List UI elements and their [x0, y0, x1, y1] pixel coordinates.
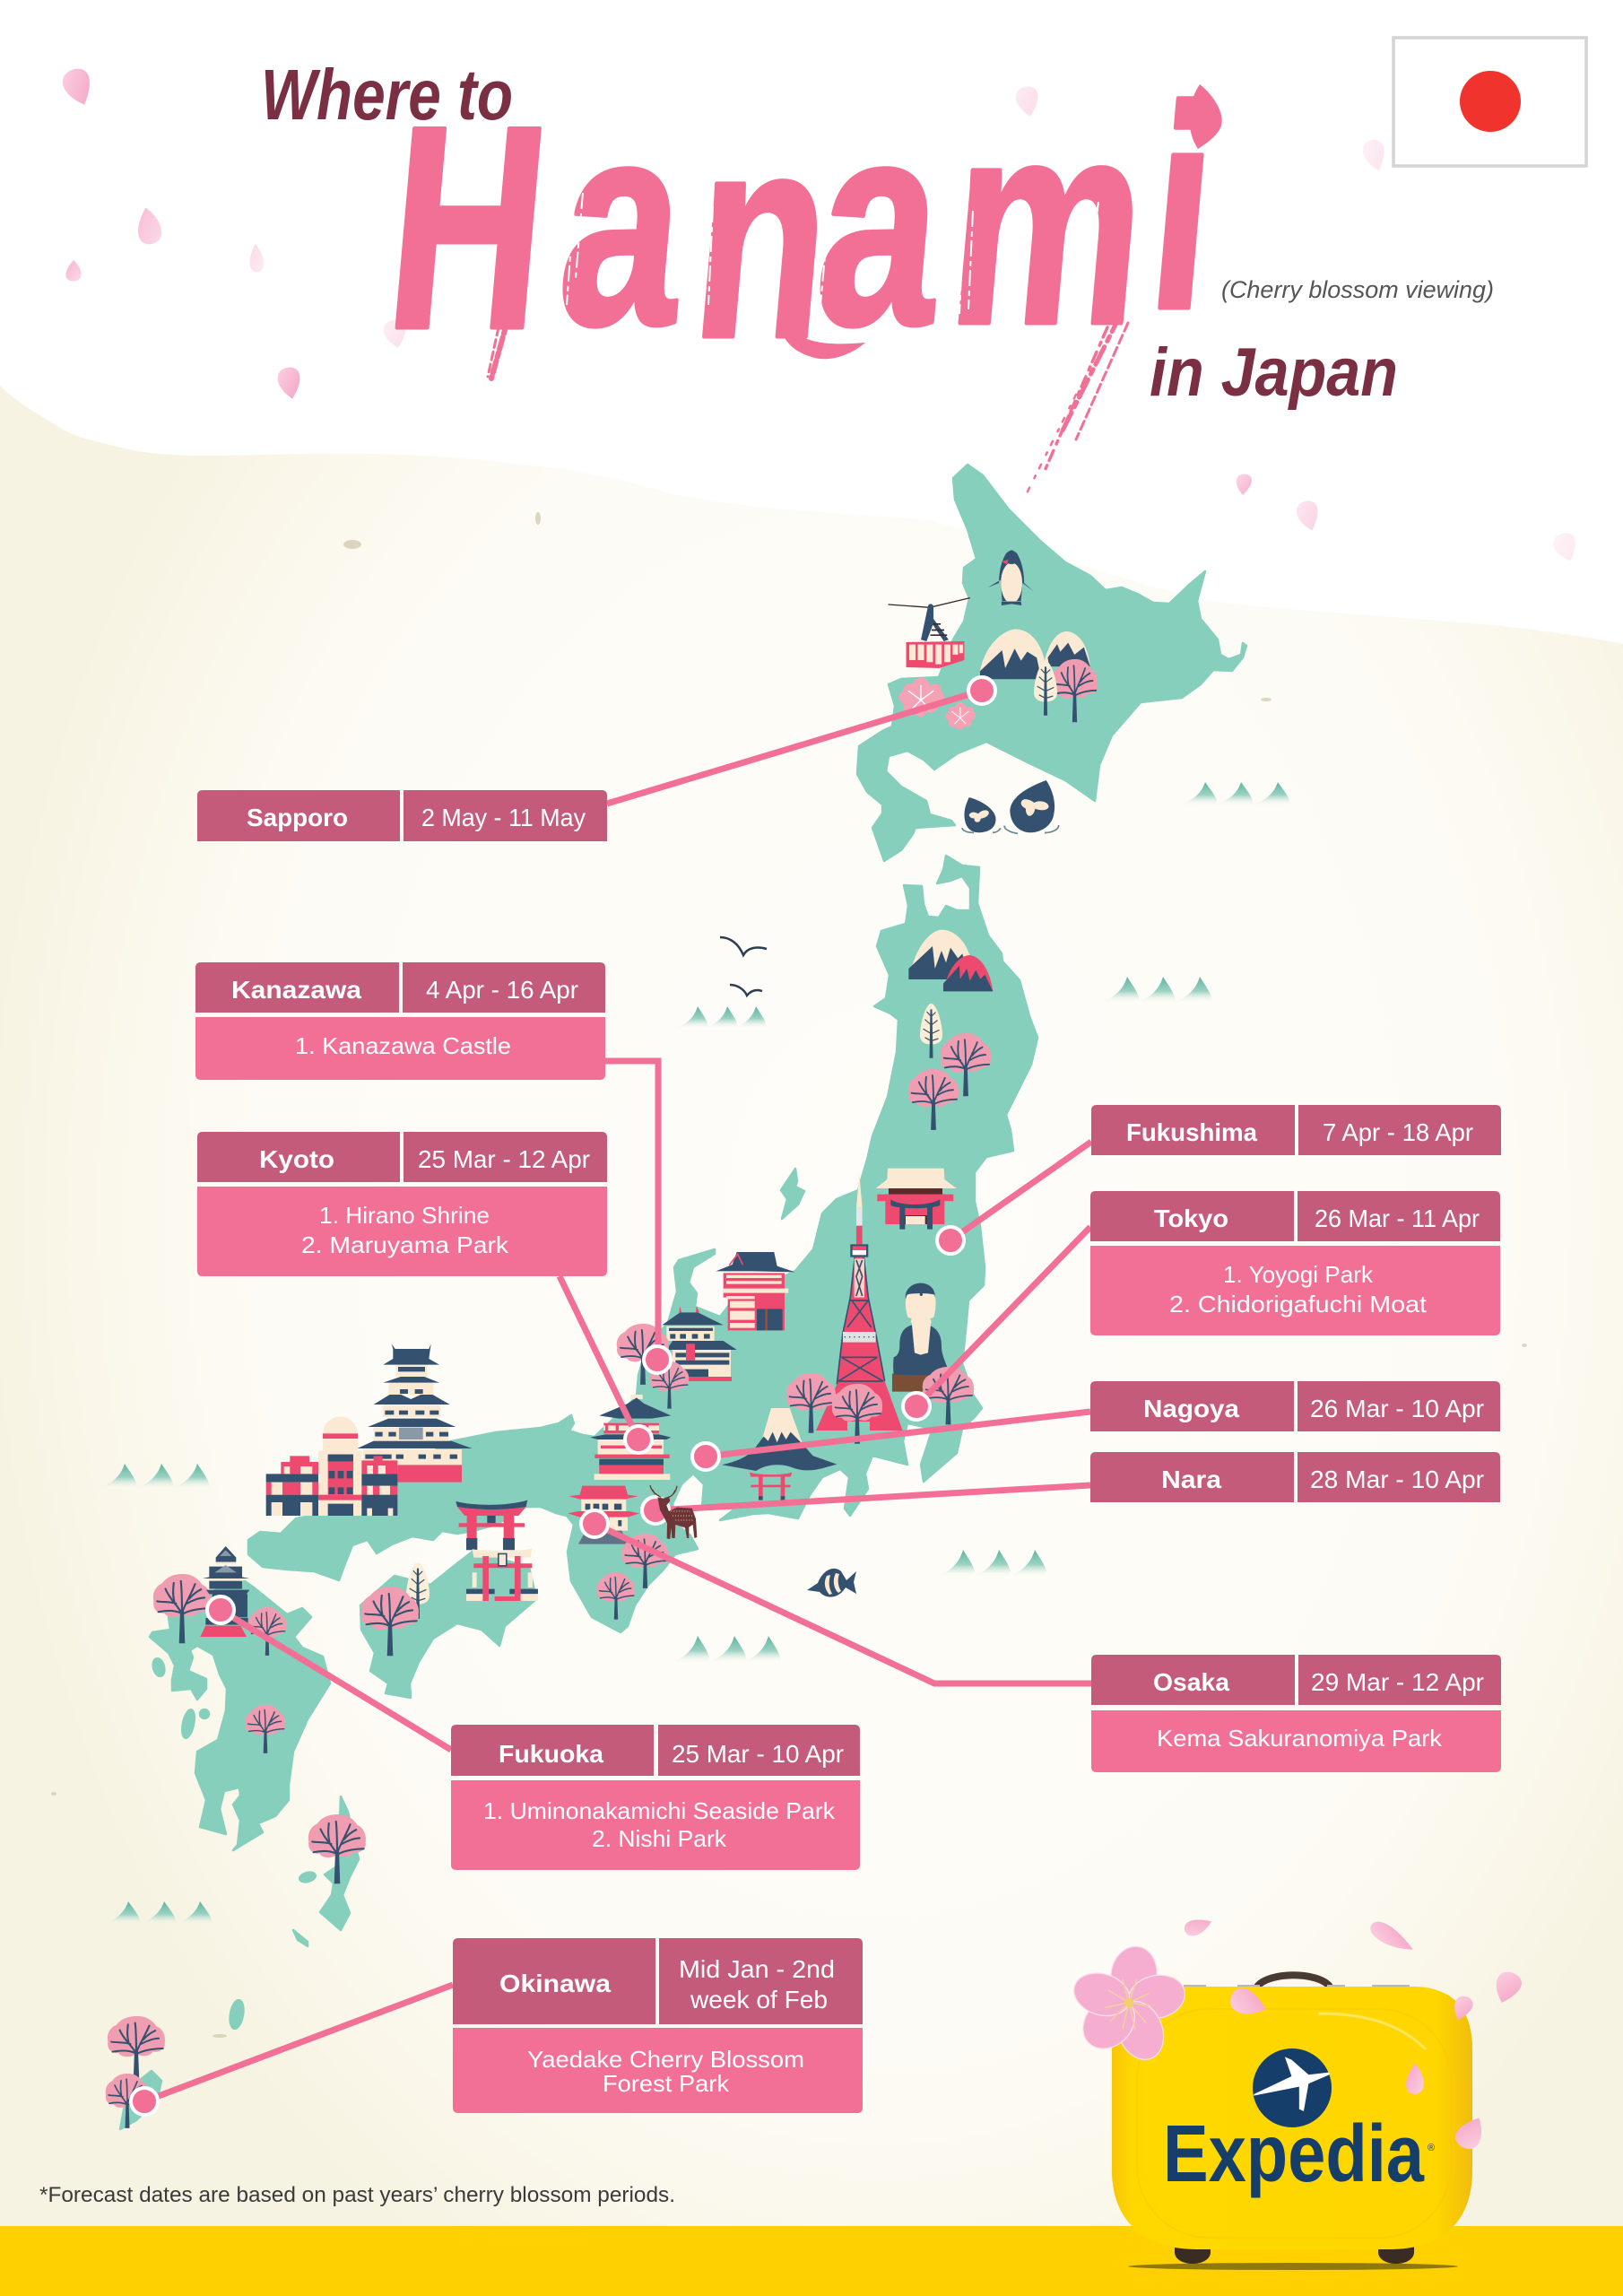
callout: Osaka — [1091, 1655, 1501, 1772]
callout: Nara: 28 Mar - 10 Apr — [1310, 1465, 1484, 1493]
callout: Okinawa: Okinawa — [499, 1970, 611, 1997]
suitcase handle — [1184, 1975, 1410, 1987]
callout: Kanazawa: 1. Kanazawa Castle — [295, 1032, 511, 1059]
tree: Fukuoka left — [153, 1574, 211, 1643]
icon: Hiroshima building — [266, 1416, 397, 1516]
tree: Fukuoka right — [248, 1607, 286, 1656]
icon: Miyajima torii — [456, 1500, 527, 1550]
callout: Kanazawa — [195, 962, 605, 1080]
connector lines — [144, 691, 1091, 2101]
callout: Fukuoka: 25 Mar - 10 Apr — [672, 1740, 844, 1768]
callout: Sapporo — [197, 790, 607, 841]
callout: Tokyo: 26 Mar - 11 Apr — [1315, 1205, 1480, 1232]
tree: Yakushima — [308, 1814, 366, 1883]
footnote: *Forecast dates are based on past years’ cherry blossom periods. — [39, 2183, 675, 2207]
yellow footer band — [0, 2226, 1623, 2296]
icon: Himeji castle — [357, 1344, 473, 1483]
icon: snow monkeys — [962, 780, 1059, 833]
callout: Sapporo: Sapporo — [247, 804, 348, 831]
callout: Kyoto — [197, 1132, 607, 1276]
icon: Tokyo Tower — [816, 1173, 903, 1431]
icon: Great Buddha — [892, 1283, 948, 1392]
small southern islands — [120, 1657, 359, 2129]
subtitle: (Cherry blossom viewing) — [1221, 276, 1494, 303]
title: in Japan: in Japan — [1150, 335, 1398, 411]
callout: Osaka: Kema Sakuranomiya Park — [1157, 1725, 1443, 1752]
map of Japan — [120, 465, 1246, 2129]
suitcase body — [1112, 1987, 1472, 2249]
icon: snowy mountains — [980, 630, 1090, 679]
icon: penguin — [988, 550, 1034, 605]
title: Where to: Where to — [261, 55, 513, 135]
sea waves — [94, 782, 1290, 1925]
Hokkaido icons — [889, 550, 1090, 833]
callout: Nagoya — [1090, 1381, 1500, 1431]
icon: Kumamoto castle — [200, 1546, 249, 1637]
callout: Kyoto: 1. Hirano Shrine — [319, 1202, 490, 1229]
callout: Osaka: 29 Mar - 12 Apr — [1311, 1668, 1484, 1696]
icon: Toyama temple — [716, 1252, 795, 1330]
Expedia suitcase — [1069, 1914, 1524, 2270]
callout: Fukushima: 7 Apr - 18 Apr — [1323, 1118, 1473, 1146]
callout: Sapporo: 2 May - 11 May — [421, 804, 586, 831]
callout: Tokyo: Tokyo — [1154, 1205, 1228, 1232]
callout: Kyoto: 2. Maruyama Park — [301, 1231, 509, 1258]
callout: Osaka: Osaka — [1153, 1668, 1229, 1696]
tree: Tohoku pale — [920, 1004, 942, 1058]
callout: Kanazawa: 4 Apr - 16 Apr — [426, 976, 578, 1004]
callout: Nara — [1090, 1452, 1500, 1502]
icon: Miyajima gate — [466, 1549, 538, 1601]
callout: Fukuoka — [451, 1725, 860, 1870]
tree: Hokkaido pale — [1034, 661, 1057, 716]
callout: Tokyo — [1090, 1191, 1500, 1335]
icon: Kanazawa castle — [650, 1306, 737, 1381]
callout: Okinawa: Mid Jan - 2nd — [679, 1955, 835, 1983]
suitcase shadow — [1128, 2263, 1458, 2270]
falling petals: top — [59, 65, 1581, 564]
callout: Okinawa: Yaedake Cherry Blossom — [527, 2046, 804, 2073]
callout: Fukushima: Fukushima — [1126, 1118, 1257, 1146]
Expedia logo — [1163, 2048, 1435, 2199]
Expedia logo: Expedia — [1163, 2109, 1425, 2199]
tree: Tohoku blossom 2 — [908, 1069, 959, 1130]
island: Hokkaido — [857, 465, 1246, 861]
icon: ropeway gondola — [889, 598, 970, 668]
callout: Fukushima — [1091, 1105, 1501, 1155]
island: Sado — [781, 1169, 804, 1219]
callout: Kanazawa: Kanazawa — [231, 976, 361, 1004]
tree: Okinawa lower — [106, 2074, 149, 2128]
icon: Kyoto pagoda — [590, 1395, 671, 1480]
callout: Okinawa: Forest Park — [603, 2070, 730, 2097]
callout: Nagoya: 26 Mar - 10 Apr — [1310, 1395, 1484, 1422]
callout: Tokyo: 1. Yoyogi Park — [1223, 1261, 1374, 1288]
callout: Nara: Nara — [1161, 1465, 1221, 1493]
Chubu and Kanto icons — [650, 1173, 948, 1500]
icon: birds — [720, 937, 767, 996]
title: Hanami: Hanami — [377, 48, 1227, 398]
callout: Okinawa — [453, 1938, 863, 2113]
island: Kyushu — [150, 1581, 330, 1850]
tree: Tohoku blossom 1 — [941, 1033, 991, 1096]
callout: Okinawa: week of Feb — [690, 1986, 828, 2013]
callout: Fukuoka: 2. Nishi Park — [592, 1825, 727, 1852]
callout: Fukuoka: Fukuoka — [499, 1740, 603, 1768]
petals around suitcase — [1183, 1914, 1524, 2153]
brush details on Hanami — [488, 84, 1222, 493]
callout: Tokyo: 2. Chidorigafuchi Moat — [1169, 1291, 1428, 1318]
callout: Nagoya: Nagoya — [1143, 1395, 1239, 1422]
tree: Hokkaido blossom — [1052, 659, 1098, 722]
trees: Shikoku and Kansai — [361, 1534, 668, 1656]
tree: Kyushu centre — [246, 1705, 285, 1753]
callout: Kyoto: 25 Mar - 12 Apr — [418, 1145, 590, 1173]
icon: Tohoku temple — [876, 1169, 957, 1230]
trees around Kanazawa and Tokyo — [617, 1324, 974, 1444]
icon: fish — [807, 1569, 856, 1597]
suitcase wheels — [1175, 2247, 1414, 2264]
callout: Fukuoka: 1. Uminonakamichi Seaside Park — [483, 1797, 836, 1824]
icon: sakura flowers — [898, 678, 944, 717]
icon: Osaka castle — [568, 1486, 639, 1544]
location pins — [131, 677, 995, 2115]
island: Shikoku — [360, 1552, 536, 1698]
paper specks — [51, 512, 1527, 2038]
island: Honshu — [248, 856, 1037, 1632]
white wavy sky area — [0, 0, 1623, 644]
tree: Okinawa upper — [108, 2016, 165, 2082]
callout: Kyoto: Kyoto — [259, 1145, 334, 1173]
icon: cherry blossom — [1069, 1943, 1189, 2066]
Japanese flag — [1393, 38, 1586, 166]
icon: Mount Fuji with torii — [722, 1408, 837, 1500]
Chugoku and Kansai icons — [266, 1344, 671, 1601]
icon: Tohoku mountains — [908, 930, 993, 991]
icon: Nara deer — [650, 1485, 697, 1539]
Tohoku icons — [876, 930, 993, 1230]
Kyushu icons — [106, 1546, 366, 2128]
Expedia logo: ® — [1428, 2143, 1435, 2153]
